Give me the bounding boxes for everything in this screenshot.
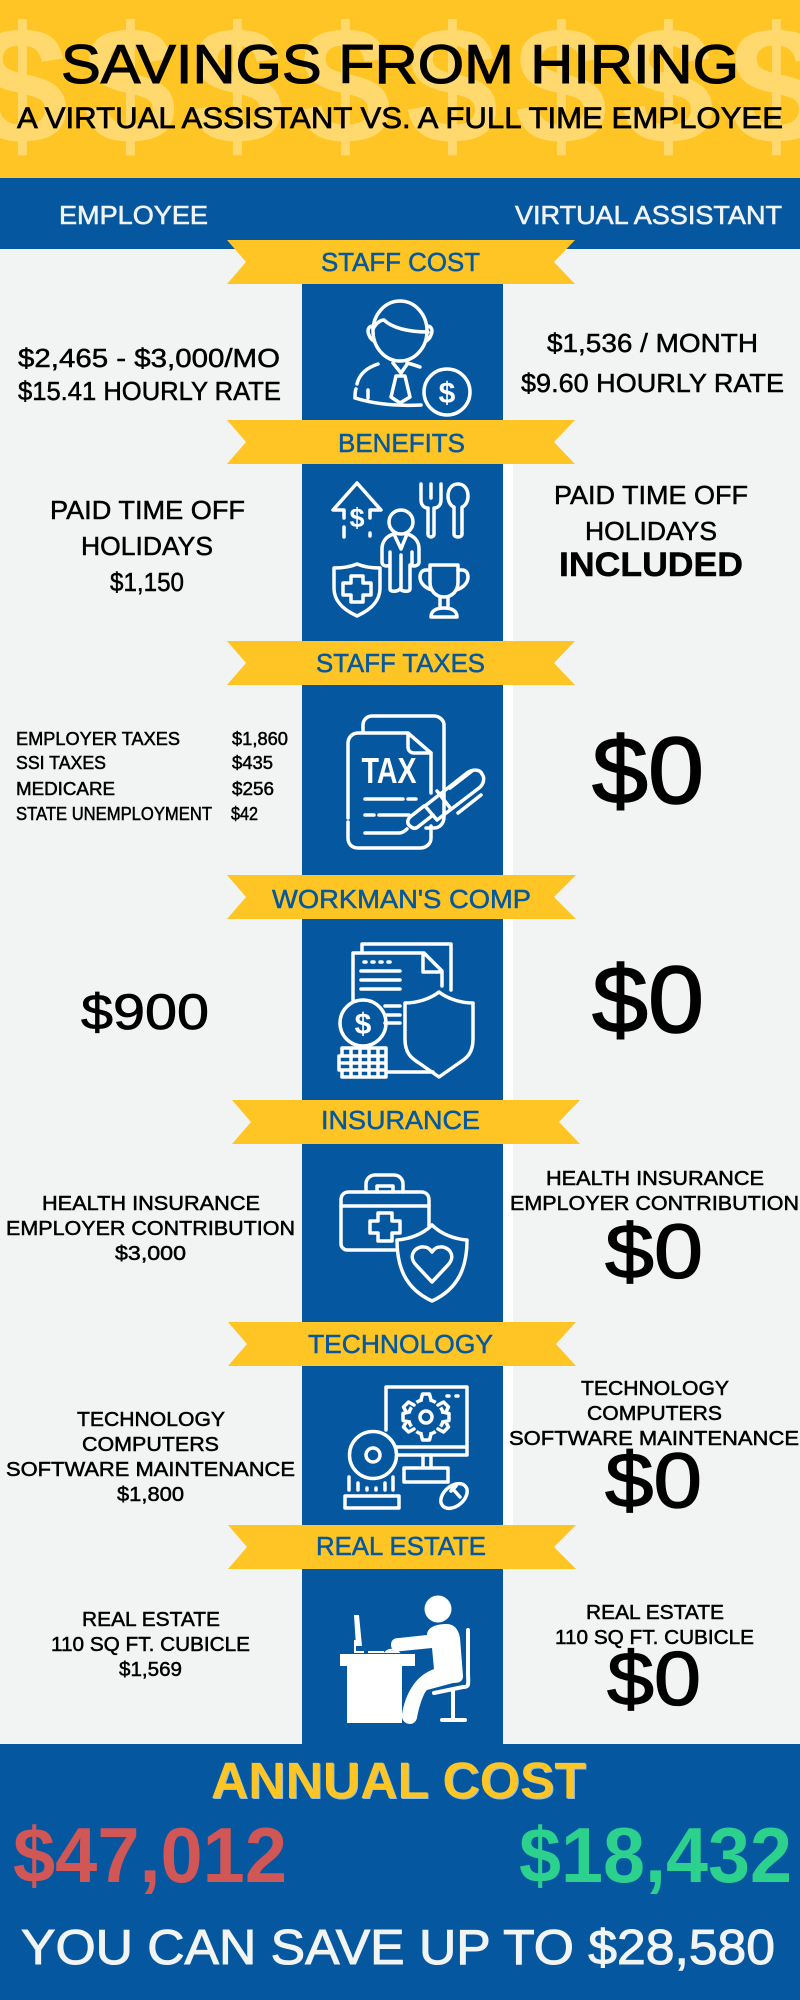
annual cost heading: ANNUAL COST bbox=[211, 1752, 586, 1809]
employee insurance: EMPLOYER CONTRIBUTION bbox=[6, 1218, 295, 1240]
employee real estate: 110 SQ FT. CUBICLE bbox=[51, 1634, 250, 1656]
icon: employee with dollar coin bbox=[355, 301, 470, 415]
virtual assistant staff cost: $9.60 HOURLY RATE bbox=[521, 368, 784, 398]
employee tax list: $1,860 bbox=[232, 729, 288, 749]
virtual assistant technology: TECHNOLOGY bbox=[581, 1378, 729, 1400]
employee real estate: REAL ESTATE bbox=[82, 1609, 220, 1631]
ribbon: staff cost bbox=[227, 240, 575, 284]
icon: benefits cluster: $ bbox=[349, 503, 365, 533]
employee tax list bbox=[16, 729, 288, 824]
employee tax list: $42 bbox=[231, 804, 258, 824]
virtual assistant heading: VIRTUAL ASSISTANT bbox=[515, 200, 782, 230]
employee benefits: PAID TIME OFF bbox=[50, 495, 245, 525]
ribbon: technology bbox=[228, 1322, 576, 1366]
ribbon: real estate: REAL ESTATE bbox=[316, 1531, 486, 1561]
ribbon: staff taxes: STAFF TAXES bbox=[316, 648, 485, 678]
virtual assistant technology bbox=[509, 1378, 799, 1524]
employee tax list: $435 bbox=[232, 753, 273, 773]
virtual assistant benefits bbox=[554, 480, 748, 584]
virtual assistant real estate bbox=[555, 1602, 754, 1722]
ribbon: insurance: INSURANCE bbox=[321, 1105, 480, 1135]
employee tax list: STATE UNEMPLOYMENT bbox=[16, 804, 212, 824]
virtual assistant staff cost: $1,536 / MONTH bbox=[547, 328, 758, 358]
employee tax list: MEDICARE bbox=[16, 779, 115, 799]
employee tax list: $256 bbox=[232, 779, 274, 799]
employee staff cost bbox=[18, 343, 281, 406]
virtual assistant staff cost bbox=[521, 328, 784, 398]
ribbon: benefits bbox=[227, 420, 575, 464]
icon: tax document and pen: TAX bbox=[362, 750, 416, 791]
icon: first aid kit and heart shield bbox=[341, 1175, 467, 1301]
subtitle: A VIRTUAL ASSISTANT VS. A FULL TIME EMPLOYEE bbox=[17, 102, 783, 135]
virtual assistant tax amount: $0 bbox=[592, 718, 704, 824]
employee technology: COMPUTERS bbox=[82, 1434, 219, 1456]
ribbon: insurance bbox=[232, 1100, 580, 1144]
virtual assistant real estate: $0 bbox=[607, 1637, 701, 1722]
ribbon: staff cost: STAFF COST bbox=[321, 247, 480, 277]
dollar sign pattern bbox=[0, 0, 800, 179]
virtual assistant technology: $0 bbox=[605, 1436, 702, 1524]
virtual assistant real estate: REAL ESTATE bbox=[586, 1602, 724, 1624]
employee insurance: $3,000 bbox=[115, 1243, 186, 1265]
ribbon: staff taxes bbox=[227, 641, 575, 685]
savings statement: YOU CAN SAVE UP TO $28,580 bbox=[21, 1921, 775, 1975]
employee real estate bbox=[51, 1609, 250, 1681]
employee technology: $1,800 bbox=[117, 1484, 184, 1506]
virtual assistant insurance: HEALTH INSURANCE bbox=[546, 1168, 764, 1190]
ribbon: workman's comp: WORKMAN'S COMP bbox=[272, 884, 531, 914]
icon: employee with dollar coin: $ bbox=[439, 377, 456, 410]
virtual assistant workman's comp amount: $0 bbox=[592, 947, 704, 1053]
virtual assistant technology: COMPUTERS bbox=[587, 1403, 722, 1425]
virtual assistant insurance: $0 bbox=[605, 1209, 703, 1295]
virtual assistant benefits: PAID TIME OFF bbox=[554, 480, 748, 510]
annual cost panel bbox=[0, 1744, 800, 2000]
employee staff cost: $2,465 - $3,000/MO bbox=[18, 343, 280, 373]
employee technology: TECHNOLOGY bbox=[77, 1409, 225, 1431]
employee benefits: HOLIDAYS bbox=[81, 531, 213, 561]
column header band bbox=[0, 178, 800, 249]
employee insurance: HEALTH INSURANCE bbox=[42, 1193, 260, 1215]
virtual assistant technology: SOFTWARE MAINTENANCE bbox=[509, 1428, 799, 1450]
employee workman's comp amount: $900 bbox=[81, 984, 209, 1040]
ribbon: real estate bbox=[228, 1525, 576, 1569]
icon: person working at desk bbox=[340, 1596, 468, 1724]
title: SAVINGS FROM HIRING bbox=[61, 33, 739, 95]
icon: computer, disc and mouse bbox=[345, 1387, 472, 1513]
header banner bbox=[0, 0, 800, 179]
employee tax list: EMPLOYER TAXES bbox=[16, 729, 180, 749]
icon: documents, coin and shield: $ bbox=[355, 1008, 372, 1041]
employee insurance bbox=[6, 1193, 295, 1265]
icon: documents, coin and shield bbox=[339, 944, 473, 1077]
employee technology bbox=[6, 1409, 295, 1506]
employee tax list: SSI TAXES bbox=[16, 753, 106, 773]
virtual assistant annual cost: $18,432 bbox=[519, 1811, 792, 1899]
virtual assistant real estate: 110 SQ FT. CUBICLE bbox=[555, 1627, 754, 1649]
employee heading: EMPLOYEE bbox=[59, 200, 208, 230]
icon: benefits cluster bbox=[333, 483, 468, 617]
employee real estate: $1,569 bbox=[119, 1659, 182, 1681]
ribbon: technology: TECHNOLOGY bbox=[308, 1329, 493, 1359]
ribbon: workman's comp bbox=[227, 875, 576, 919]
virtual assistant insurance: EMPLOYER CONTRIBUTION bbox=[510, 1193, 799, 1215]
virtual assistant benefits: HOLIDAYS bbox=[585, 516, 717, 546]
virtual assistant benefits: INCLUDED bbox=[559, 546, 743, 584]
center column bbox=[302, 249, 513, 1744]
icon: tax document and pen bbox=[348, 716, 484, 848]
employee staff cost: $15.41 HOURLY RATE bbox=[18, 376, 281, 406]
ribbon: benefits: BENEFITS bbox=[338, 428, 465, 458]
employee benefits bbox=[50, 495, 245, 597]
virtual assistant insurance bbox=[510, 1168, 799, 1295]
employee technology: SOFTWARE MAINTENANCE bbox=[6, 1459, 295, 1481]
employee annual cost: $47,012 bbox=[13, 1811, 287, 1899]
employee benefits: $1,150 bbox=[110, 567, 184, 597]
